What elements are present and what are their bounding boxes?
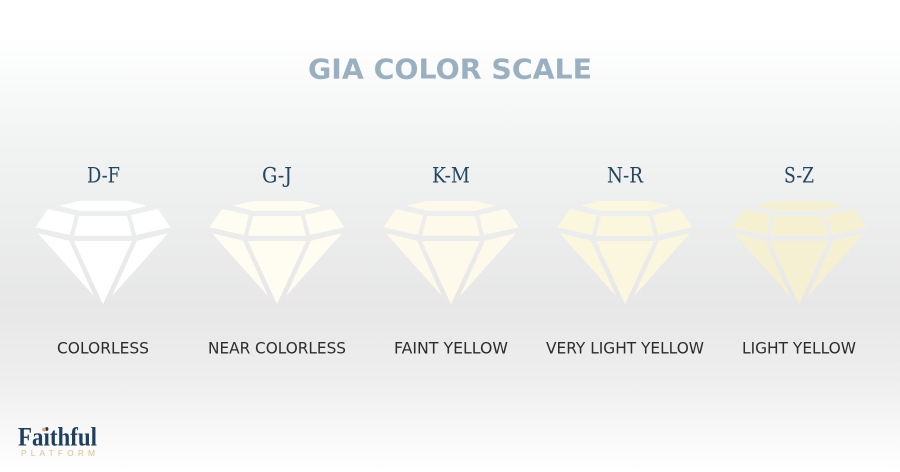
grade label D-F: D-F <box>87 164 120 188</box>
icon: light yellow diamond <box>732 201 866 304</box>
column: G-J near colorless <box>208 164 346 358</box>
label near colorless: NEAR COLORLESS <box>208 340 346 358</box>
icon: white diamond <box>36 201 170 304</box>
column: K-M faint yellow <box>384 164 518 358</box>
grade label G-J: G-J <box>262 164 292 188</box>
label faint yellow: FAINT YELLOW <box>394 340 508 358</box>
column: S-Z light yellow <box>732 164 866 358</box>
logo wordmark: Faithful <box>18 423 97 452</box>
logo accent dot <box>42 428 46 431</box>
column: N-R very light yellow <box>546 164 704 358</box>
column: D-F colorless <box>36 164 170 358</box>
icon: faint yellow diamond <box>384 201 518 304</box>
icon: very light yellow diamond <box>558 201 692 304</box>
label light yellow: LIGHT YELLOW <box>742 340 856 358</box>
grade label N-R: N-R <box>607 164 644 188</box>
grade label K-M: K-M <box>432 164 470 188</box>
logo subtitle: PLATFORM <box>21 448 95 458</box>
logo: Faithful Platform <box>18 423 97 458</box>
label very light yellow: VERY LIGHT YELLOW <box>546 340 704 358</box>
icon: near colorless diamond <box>210 201 344 304</box>
label colorless: COLORLESS <box>57 340 149 358</box>
grade label S-Z: S-Z <box>784 164 814 188</box>
title: GIA COLOR SCALE <box>308 52 592 86</box>
